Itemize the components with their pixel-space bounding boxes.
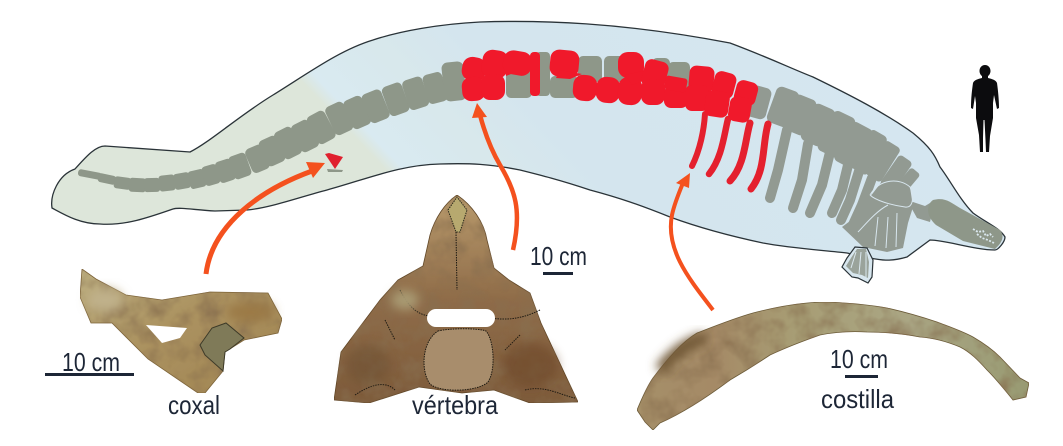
skull [928, 199, 1003, 249]
arrow: coxal to pelvis [206, 162, 325, 274]
arrow: rib to ribcage [671, 173, 713, 310]
human scale silhouette [971, 65, 999, 152]
scale bar: vertebra: 10 cm [530, 241, 587, 271]
flipper [842, 247, 873, 283]
red preserved vertebrae [460, 48, 760, 124]
scapula and arm white outlines [858, 181, 912, 248]
rib fossil [637, 302, 1029, 430]
red preserved ribs [692, 114, 768, 189]
scale bar: coxal: 10 cm [62, 347, 120, 377]
grey skeleton: neck, ribs and thorax [742, 84, 935, 252]
coxal bone [80, 269, 282, 393]
teeth [973, 229, 994, 243]
scale bar: rib: 10 cm [830, 344, 888, 374]
vertebra fossil [334, 195, 578, 403]
label: vertebra: vértebra [412, 390, 498, 420]
label: rib: costilla [821, 384, 894, 414]
label: coxal: coxal [168, 390, 220, 420]
grey spine: tail and back vertebrae [77, 52, 690, 192]
manatee body silhouette [52, 21, 1005, 260]
red preserved pelvis bone [325, 153, 343, 172]
arrow: vertebra to spine [472, 103, 517, 250]
